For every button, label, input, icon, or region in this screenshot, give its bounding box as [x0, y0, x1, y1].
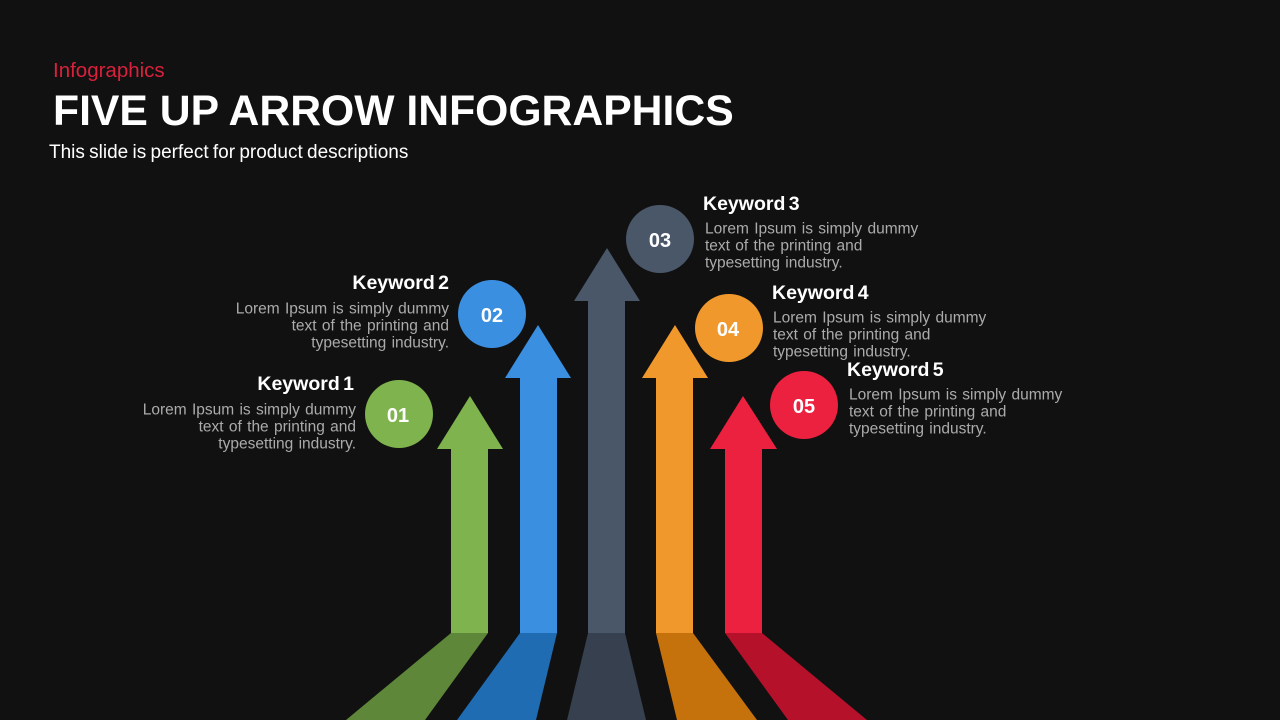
- text block: keyword 4: [772, 282, 987, 360]
- arrow 5: red: [710, 396, 867, 720]
- text block: keyword 3: typesetting industry.: [705, 254, 843, 272]
- badge 03: [626, 205, 694, 273]
- text block: keyword 1: typesetting industry.: [218, 436, 356, 452]
- text block: keyword 3: Lorem Ipsum is simply dummy: [705, 220, 919, 238]
- text block: keyword 2: typesetting industry.: [311, 334, 449, 352]
- text block: keyword 5: [847, 359, 1063, 438]
- text block: keyword 1: text of the printing and: [199, 418, 356, 436]
- subtitle: This slide is perfect for product descriptions: [49, 142, 408, 163]
- text block: keyword 4: Lorem Ipsum is simply dummy: [773, 310, 987, 326]
- arrow 2: blue: [457, 325, 571, 720]
- text block: keyword 2: text of the printing and: [292, 318, 449, 334]
- badge 02: [458, 280, 526, 348]
- text block: keyword 1: Keyword 1: [257, 373, 354, 395]
- badge 05: [770, 371, 838, 439]
- badge 03: 03: [649, 230, 671, 252]
- text block: keyword 1: [143, 373, 356, 452]
- text block: keyword 4: Keyword 4: [772, 282, 869, 304]
- arrow 1: green: [346, 396, 503, 720]
- badge 04: 04: [717, 319, 740, 341]
- arrow 3: slate: [567, 248, 646, 720]
- text block: keyword 2: [236, 272, 449, 352]
- arrow 4: orange: [642, 325, 757, 720]
- text block: keyword 2: Keyword 2: [352, 272, 449, 294]
- text block: keyword 3: [703, 193, 919, 272]
- text block: keyword 2: Lorem Ipsum is simply dummy: [236, 300, 449, 318]
- text block: keyword 5: Lorem Ipsum is simply dummy: [849, 386, 1063, 404]
- badge 05: 05: [793, 396, 815, 418]
- text block: keyword 5: text of the printing and: [849, 404, 1006, 420]
- text block: keyword 5: Keyword 5: [847, 359, 944, 381]
- text block: keyword 3: text of the printing and: [705, 238, 862, 254]
- title: FIVE UP ARROW INFOGRAPHICS: [53, 87, 734, 135]
- badge 01: [365, 380, 433, 448]
- text block: keyword 4: text of the printing and: [773, 326, 930, 344]
- badge 04: [695, 294, 763, 362]
- text block: keyword 1: Lorem Ipsum is simply dummy: [143, 402, 356, 418]
- eyebrow label: Infographics: [53, 59, 165, 82]
- text block: keyword 4: typesetting industry.: [773, 344, 911, 360]
- badge 01: 01: [387, 405, 409, 427]
- text block: keyword 3: Keyword 3: [703, 193, 800, 215]
- text block: keyword 5: typesetting industry.: [849, 420, 987, 438]
- badge 02: 02: [481, 305, 503, 327]
